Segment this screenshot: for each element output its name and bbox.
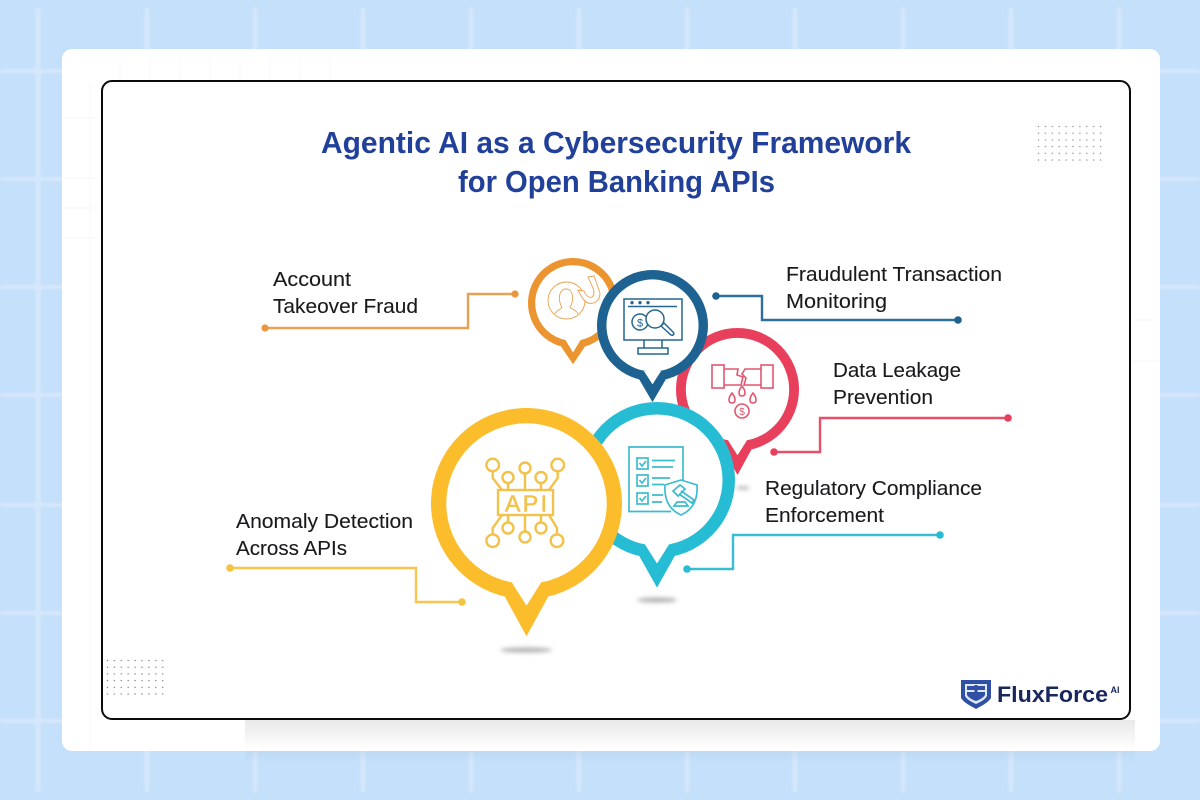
logo: FluxForce AI <box>961 680 1120 709</box>
pin: orange account takeover <box>528 258 618 364</box>
label: regulatory compliance enforcement: Regulatory Compliance <box>765 478 982 500</box>
label: regulatory compliance enforcement <box>765 478 982 527</box>
icon: monitor with magnifier: $ <box>637 318 643 330</box>
label: data leakage prevention: Data Leakage <box>833 360 961 382</box>
title: for Open Banking APIs <box>458 165 775 199</box>
pin shadows <box>500 486 750 653</box>
icon: checklist with gavel shield <box>629 447 697 515</box>
icon: API chip <box>486 459 564 547</box>
pin: blue fraud monitoring <box>597 270 708 402</box>
label: anomaly detection across APIs <box>236 511 413 560</box>
logo: FluxForce AI: FluxForce <box>997 682 1108 707</box>
pin: red data leakage <box>676 328 799 475</box>
pin: teal regulatory compliance <box>579 402 735 588</box>
label: anomaly detection across APIs: Anomaly Detection <box>236 511 413 533</box>
label: account takeover fraud: Takeover Fraud <box>273 296 418 318</box>
label: account takeover fraud <box>273 269 418 318</box>
pin: yellow anomaly detection <box>431 408 622 636</box>
label: regulatory compliance enforcement: Enforcement <box>765 505 884 527</box>
connector: data leakage <box>770 414 1012 456</box>
icon: leaking pipe: $ <box>739 407 745 418</box>
title: Agentic AI as a Cybersecurity Framework <box>321 126 911 160</box>
logo: FluxForce AI: AI <box>1110 685 1120 695</box>
label: fraudulent transaction monitoring: Monitoring <box>786 291 887 313</box>
icon: API chip: API <box>505 490 547 516</box>
connector: fraudulent transaction <box>712 292 962 324</box>
connector: regulatory compliance <box>683 531 944 573</box>
label: account takeover fraud: Account <box>273 269 351 291</box>
label: fraudulent transaction monitoring <box>786 264 1002 313</box>
connector: account takeover <box>261 290 519 332</box>
dot pattern: bottom left <box>106 659 165 699</box>
icon: account hook <box>548 276 600 319</box>
inner framed panel <box>102 81 1130 719</box>
label: anomaly detection across APIs: Across APIs <box>236 538 347 560</box>
label: data leakage prevention <box>833 360 961 409</box>
icon: monitor with magnifier <box>624 299 682 354</box>
connector: anomaly detection <box>226 564 466 606</box>
icon: leaking pipe <box>712 365 773 418</box>
title <box>321 126 911 199</box>
label: fraudulent transaction monitoring: Fraudulent Transaction <box>786 264 1002 286</box>
dot pattern: top right <box>1037 125 1103 165</box>
label: data leakage prevention: Prevention <box>833 387 933 409</box>
